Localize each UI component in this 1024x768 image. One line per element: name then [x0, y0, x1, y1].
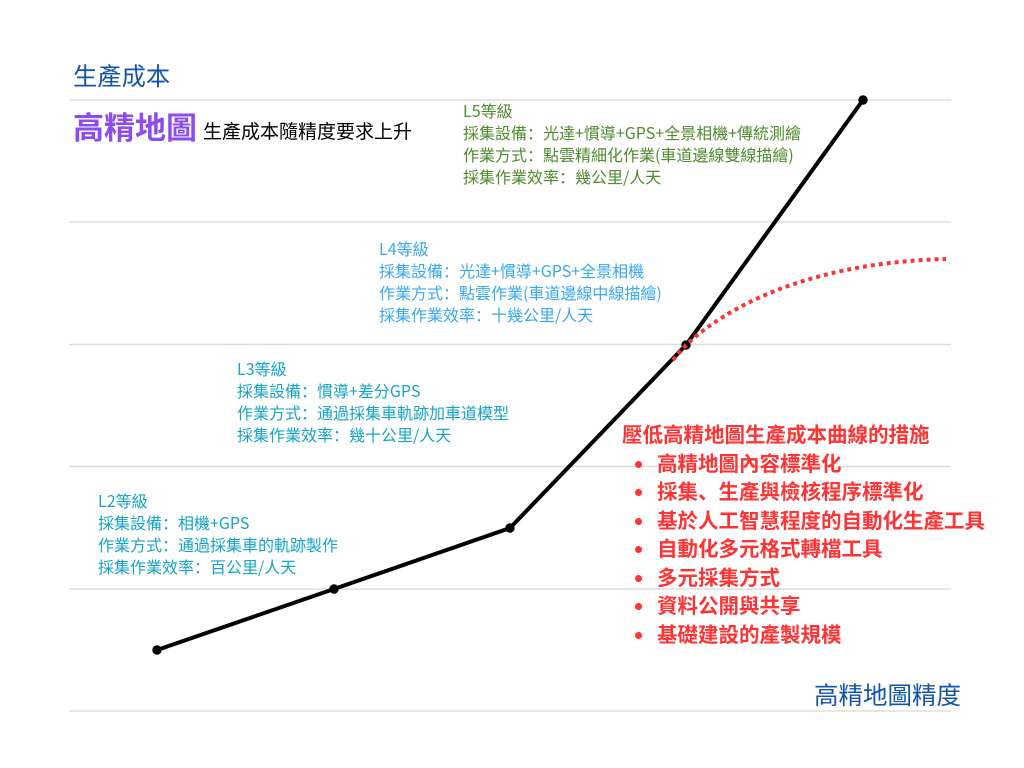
text block: L4: 作業方式：點雲作業(車道邊線中線描繪)	[379, 280, 662, 304]
text block: L3: 採集作業效率：幾十公里/人天	[237, 422, 451, 446]
text block: L2: 作業方式：通過採集車的軌跡製作	[98, 532, 338, 556]
text block: L4: 採集設備：光達+慣導+GPS+全景相機	[379, 258, 644, 282]
title: 生產成本隨精度要求上升	[203, 117, 412, 144]
text block: L2	[98, 488, 338, 578]
callout: cost reduction measures: 基於人工智慧程度的自動化生產工具	[657, 504, 985, 534]
callout: cost reduction measures: 自動化多元格式轉檔工具	[657, 532, 882, 562]
text block: L3: L3等級	[237, 356, 287, 380]
title: 高精地圖	[73, 103, 197, 148]
text block: L5	[463, 98, 801, 188]
callout: cost reduction measures: 資料公開與共享	[657, 589, 800, 619]
text block: L5: 作業方式：點雲精細化作業(車道邊線雙線描繪)	[463, 142, 794, 166]
x axis title: 高精地圖精度	[814, 677, 961, 712]
callout: cost reduction measures	[622, 418, 985, 648]
text block: L3	[237, 356, 509, 446]
text block: L5: 採集設備：光達+慣導+GPS+全景相機+傳統測繪	[463, 120, 801, 144]
text block: L4: 採集作業效率：十幾公里/人天	[379, 302, 593, 326]
title	[73, 103, 412, 148]
text block: L5: L5等級	[463, 98, 513, 122]
callout: cost reduction measures: 多元採集方式	[657, 561, 780, 591]
callout: cost reduction measures: 採集、生產與檢核程序標準化	[657, 475, 924, 505]
text block: L3: 採集設備：慣導+差分GPS	[237, 378, 420, 402]
text block: L2: 採集設備：相機+GPS	[98, 510, 249, 534]
text block: L4: L4等級	[379, 236, 429, 260]
text block: L4	[379, 236, 662, 326]
callout: cost reduction measures: 壓低高精地圖生產成本曲線的措施	[622, 418, 930, 448]
y axis title: 生產成本	[73, 57, 170, 92]
text block: L5: 採集作業效率：幾公里/人天	[463, 164, 661, 188]
text block: L2: L2等級	[98, 488, 148, 512]
text block: L3: 作業方式：通過採集車軌跡加車道模型	[237, 400, 509, 424]
callout: cost reduction measures: 基礎建設的產製規模	[657, 618, 842, 648]
text block: L2: 採集作業效率：百公里/人天	[98, 554, 296, 578]
callout: cost reduction measures: 高精地圖內容標準化	[657, 447, 842, 477]
